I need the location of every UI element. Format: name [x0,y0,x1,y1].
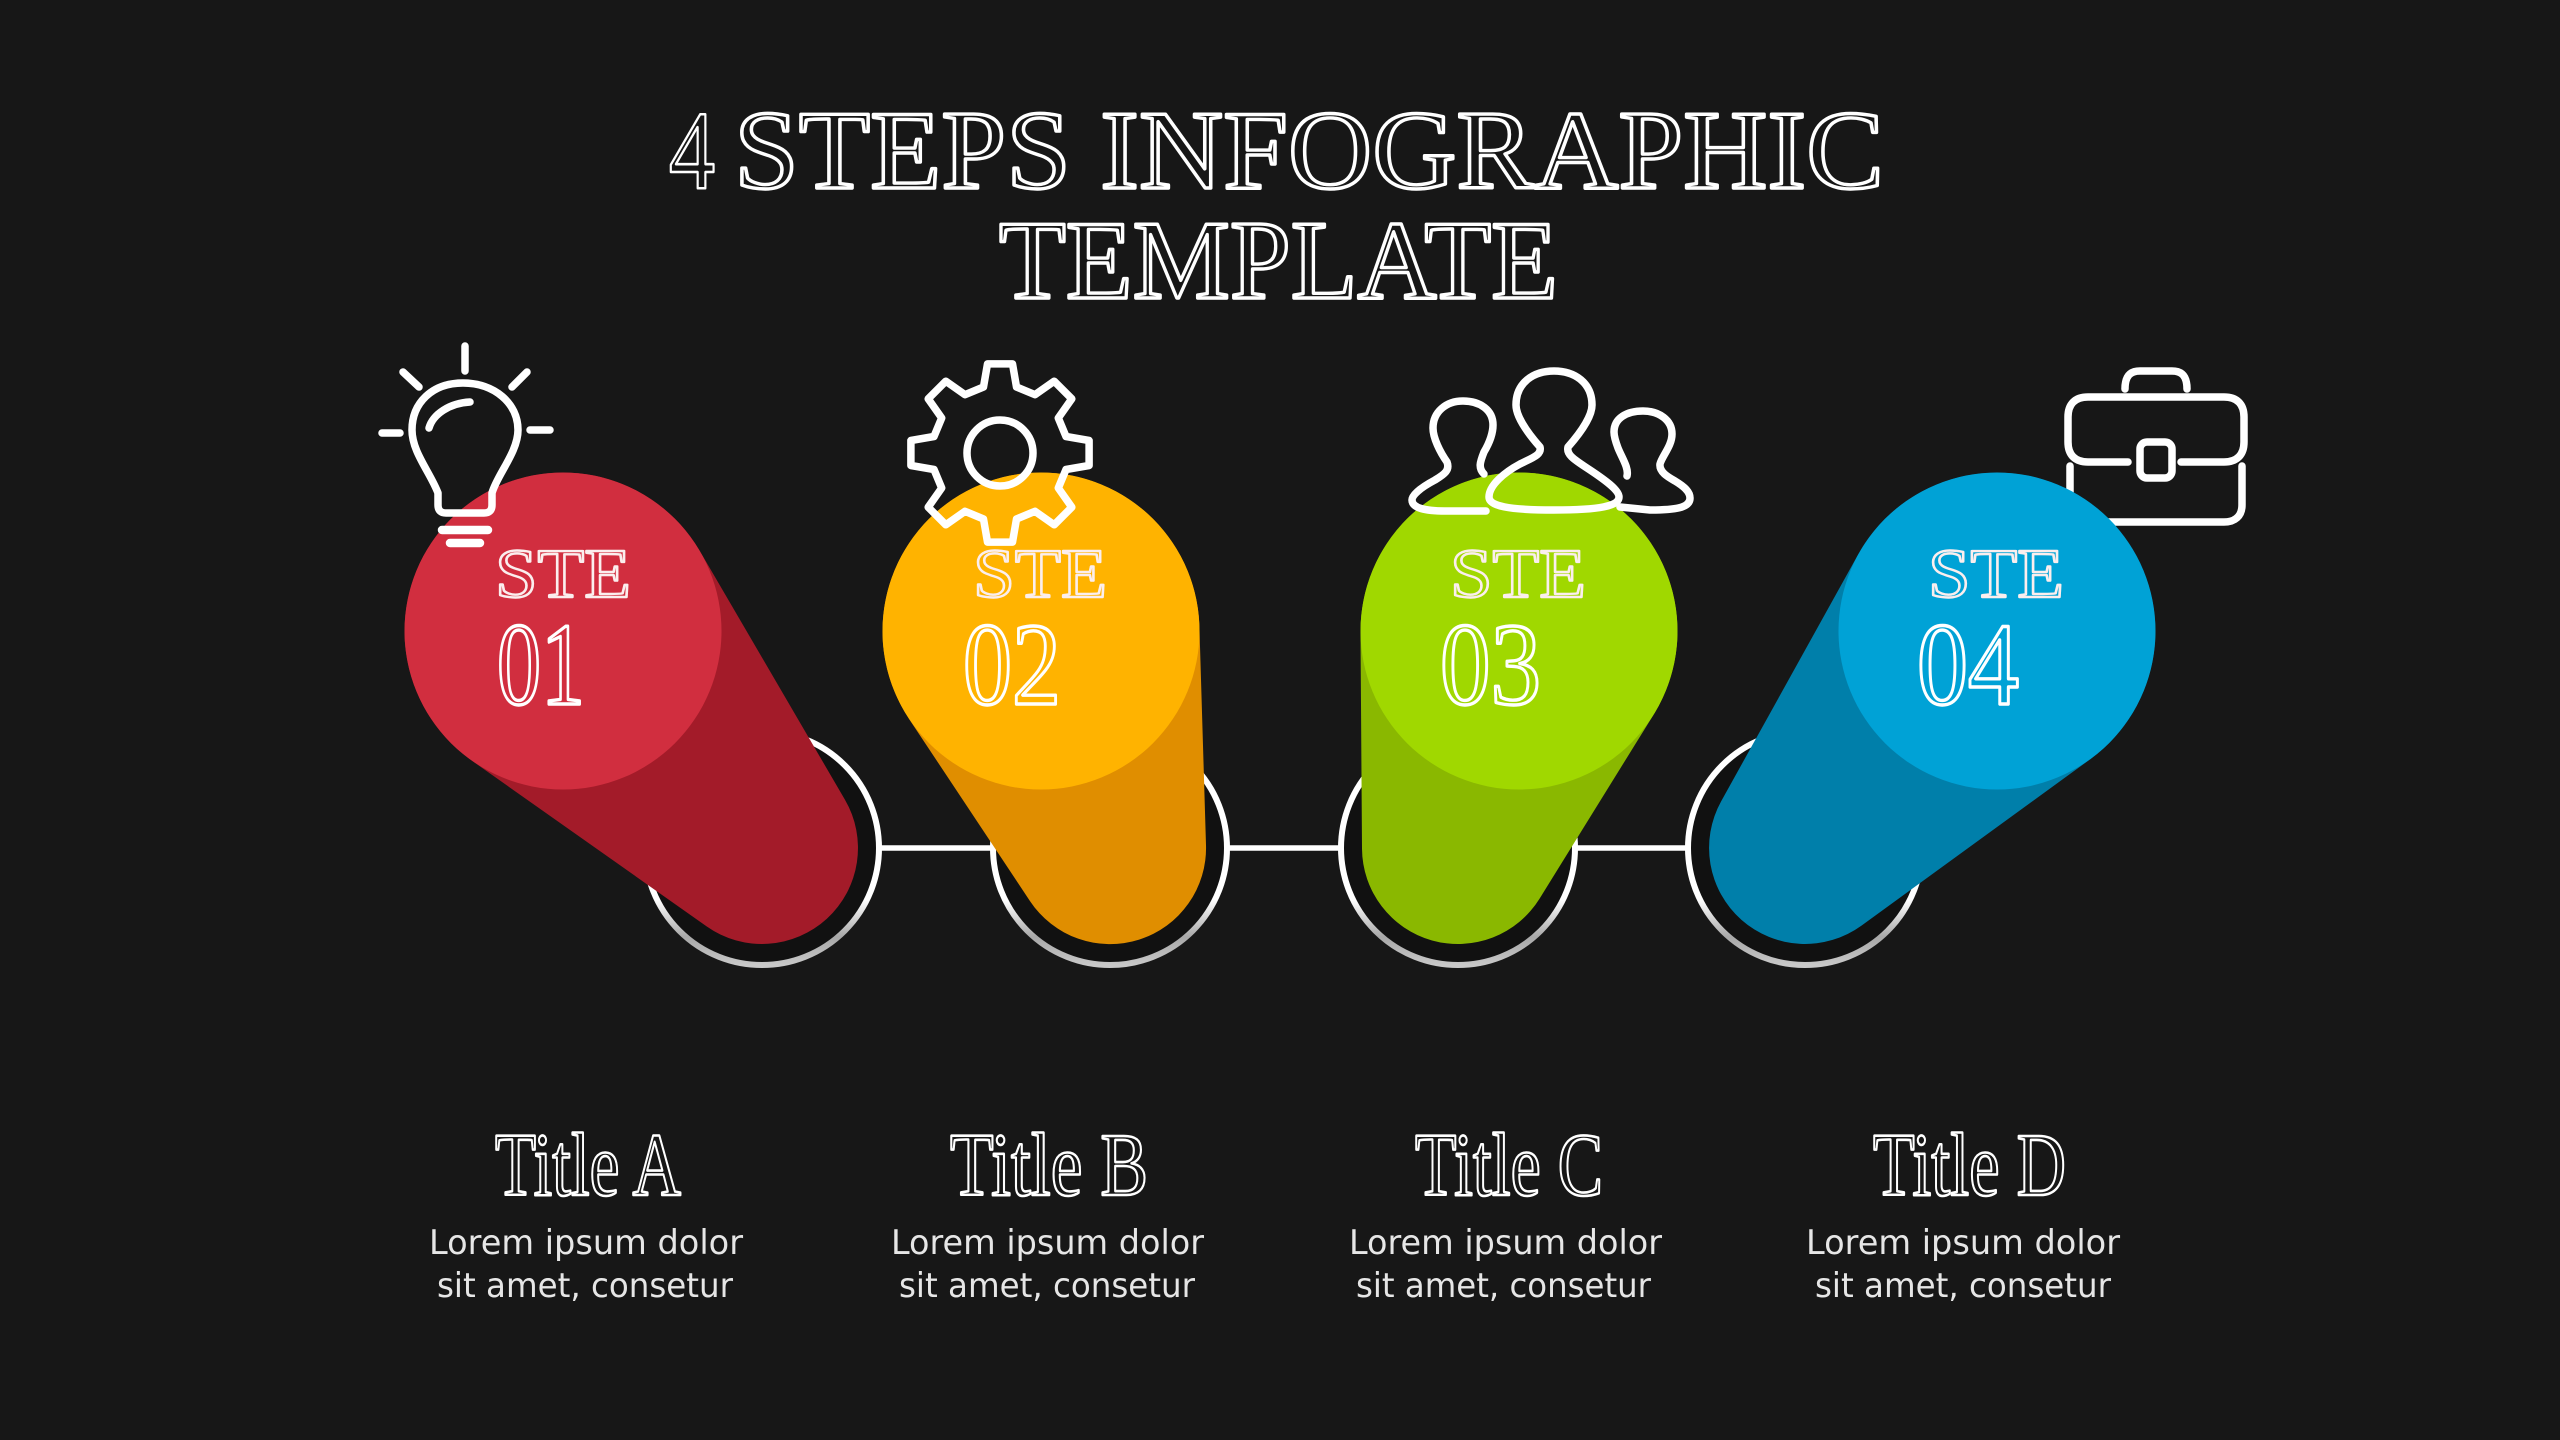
step label 4: STE [1928,536,2064,613]
text block: title D: sit amet, consetur [1815,1266,2111,1306]
ring 2 [993,731,1227,965]
step number 3: 03 [1440,599,1541,730]
cylinder face 4 [1838,472,2156,790]
ring 4 [1688,731,1922,965]
cylinder face 2 [882,472,1200,790]
step number 1: 01 [497,599,585,730]
ring 1 [645,731,879,965]
text block: title B: Title B [950,1116,1148,1215]
text block: title C [1349,1116,1662,1306]
title: 4 [669,89,715,213]
cylinder body 2 [882,473,1206,944]
cylinder body 1 [405,473,858,944]
text block: title C: Lorem ipsum dolor [1349,1223,1662,1263]
cylinder body 4 [1709,473,2155,944]
text block: title A [429,1116,743,1306]
text block: title D: Lorem ipsum dolor [1806,1223,2120,1263]
title: STEPS INFOGRAPHIC [734,89,1884,213]
cylinder face 1 [404,472,722,790]
cylinder body 3 [1360,472,1677,944]
text block: title A: sit amet, consetur [437,1266,733,1306]
step label 1: STE [495,536,631,613]
text block: title B [891,1116,1204,1306]
panel: step 3 [1341,371,1690,965]
connector line [762,845,1806,851]
icon: briefcase [2068,371,2244,522]
text block: title C: Title C [1415,1116,1603,1215]
text block: title D [1806,1116,2120,1306]
text block: title C: sit amet, consetur [1356,1266,1651,1306]
panel: step 2 [882,364,1227,965]
step label 3: STE [1450,536,1586,613]
icon: light bulb [382,346,550,543]
text block: title A: Lorem ipsum dolor [429,1223,743,1263]
text block: title B: Lorem ipsum dolor [891,1223,1204,1263]
title: TEMPLATE [999,199,1558,323]
panel: step 1 [382,346,879,965]
step number 4: 04 [1917,599,2019,730]
cylinder face 3 [1360,472,1678,790]
icon: people [1412,371,1690,511]
panel: step 4 [1688,371,2244,965]
icon: gear [911,364,1089,542]
text block: title B: sit amet, consetur [899,1266,1195,1306]
title [669,89,1884,323]
step label 2: STE [973,536,1107,613]
step number 2: 02 [963,599,1061,730]
text block: title D: Title D [1873,1116,2066,1215]
ring 3 [1341,731,1575,965]
text block: title A: Title A [495,1116,681,1215]
